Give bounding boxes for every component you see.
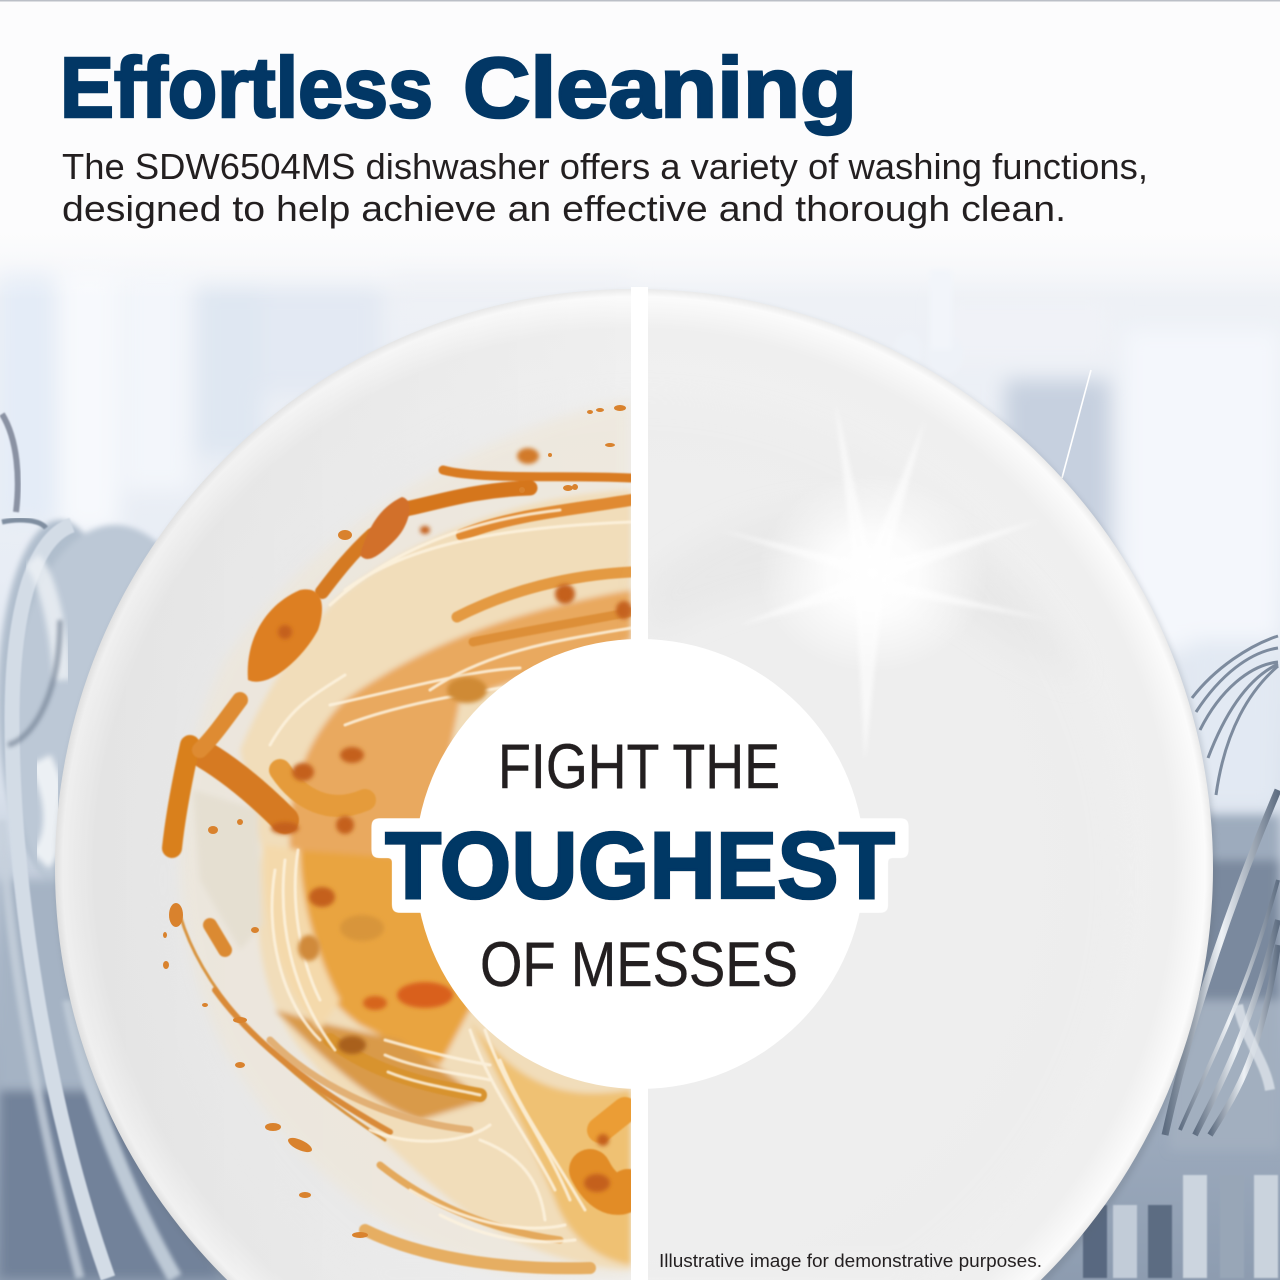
dirty half of plate: orange sauce stains: [163, 400, 632, 1278]
subtitle: The SDW6504MS dishwasher offers a variety of washing functions,: [62, 146, 1148, 187]
cream sauce base: [193, 490, 631, 1270]
main smears: [172, 470, 631, 1268]
dark sauce spots: [271, 448, 632, 1192]
plate: [55, 289, 1213, 1280]
badge text: fight the: FIGHT THE: [498, 732, 780, 802]
right cutlery basket with whisks: [1090, 636, 1278, 1278]
disclaimer: Illustrative image for demonstrative purposes.: [659, 1251, 1042, 1271]
subtitle: [62, 146, 1148, 229]
title: [60, 41, 857, 136]
subtitle: designed to help achieve an effective and thorough clean.: [62, 188, 1066, 229]
soft sauce film: [180, 400, 631, 1278]
splatter drops: [163, 405, 626, 1238]
title: Effortless: [60, 41, 433, 136]
big blob: [248, 589, 322, 682]
left plates in rack: [0, 414, 220, 1278]
badge text: toughest: TOUGHEST: [385, 813, 895, 919]
plate shadow: [56, 292, 1216, 1280]
title: Cleaning: [463, 41, 857, 136]
clean half: sparkle: [648, 400, 1080, 760]
cream brush streaks: [270, 510, 631, 1242]
center circle badge: [415, 639, 865, 1089]
center divider: [631, 287, 648, 1280]
badge text: of messes: OF MESSES: [480, 930, 798, 1000]
